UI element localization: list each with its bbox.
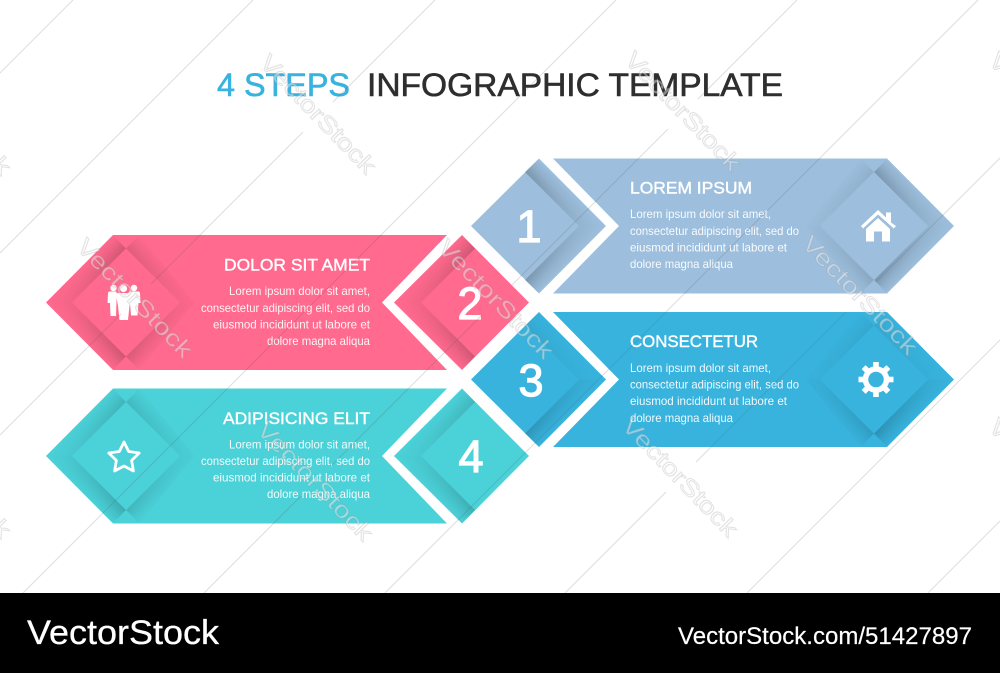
number diamond 3 bbox=[471, 312, 606, 447]
panel: step 1 lorem ipsum bbox=[471, 158, 955, 294]
body text 3: dolore magna aliqua bbox=[630, 411, 733, 425]
heading 1: LOREM IPSUM bbox=[630, 178, 752, 198]
number diamond 1: 1 bbox=[516, 201, 542, 252]
body text 2: consectetur adipiscing elit, sed do bbox=[201, 301, 370, 315]
panel: step 4 adipisicing elit bbox=[45, 388, 529, 524]
title accent: 4 steps: 4 STEPS bbox=[217, 67, 350, 103]
arrow banner 2 bbox=[46, 235, 447, 370]
footer brand: VectorStock bbox=[27, 614, 220, 652]
arrow banner 1 bbox=[553, 158, 954, 294]
body text 4: dolore magna aliqua bbox=[267, 487, 370, 501]
title main: infographic template: INFOGRAPHIC TEMPLATE bbox=[367, 67, 783, 103]
text: VectorStock bbox=[255, 49, 382, 179]
heading 3: CONSECTETUR bbox=[630, 332, 758, 351]
heading 4: ADIPISICING ELIT bbox=[223, 409, 370, 428]
body text 1: dolore magna aliqua bbox=[630, 257, 733, 271]
body text 1: Lorem ipsum dolor sit amet, bbox=[630, 207, 771, 221]
number diamond 2: 2 bbox=[457, 278, 483, 329]
arrow banner 4 bbox=[46, 388, 447, 524]
body text 2 bbox=[201, 284, 371, 348]
body text 2: eiusmod incididunt ut labore et bbox=[213, 318, 371, 332]
heading 2: DOLOR SIT AMET bbox=[224, 256, 370, 274]
title bbox=[217, 67, 783, 103]
text: VectorStock bbox=[72, 233, 199, 363]
footer bar bbox=[0, 593, 1000, 673]
footer image id: VectorStock.com/51427897 bbox=[678, 623, 972, 650]
text: VectorStock bbox=[433, 234, 560, 364]
icon diamond: gear bbox=[822, 320, 934, 444]
body text 2: Lorem ipsum dolor sit amet, bbox=[229, 284, 370, 298]
body text 2: dolore magna aliqua bbox=[267, 334, 370, 348]
number diamond 4: 4 bbox=[458, 431, 484, 482]
body text 4: consectetur adipiscing elit, sed do bbox=[201, 454, 370, 468]
icon diamond: star bbox=[66, 393, 178, 520]
body text 3: Lorem ipsum dolor sit amet, bbox=[630, 361, 771, 375]
number diamond 1 bbox=[471, 158, 606, 294]
text: VectorStock bbox=[252, 416, 379, 546]
body text 1: consectetur adipiscing elit, sed do bbox=[630, 224, 799, 238]
number diamond 4 bbox=[394, 388, 529, 524]
text: VectorStock bbox=[620, 46, 747, 176]
text: VectorStock bbox=[617, 412, 744, 542]
body text 4: eiusmod incididunt ut labore et bbox=[213, 470, 371, 484]
body text 4 bbox=[201, 438, 371, 501]
body text 1 bbox=[630, 207, 799, 271]
number diamond 2 bbox=[394, 235, 529, 370]
body text 3: eiusmod incididunt ut labore et bbox=[630, 394, 788, 408]
arrow banner 3 bbox=[553, 312, 954, 447]
body text 1: eiusmod incididunt ut labore et bbox=[630, 240, 788, 254]
number diamond 3: 3 bbox=[518, 355, 544, 406]
body text 3 bbox=[630, 361, 799, 425]
icon diamond: people bbox=[64, 238, 184, 367]
panel: step 2 dolor sit amet bbox=[45, 235, 529, 370]
body text 3: consectetur adipiscing elit, sed do bbox=[630, 378, 799, 392]
body text 4: Lorem ipsum dolor sit amet, bbox=[229, 438, 370, 452]
text: VectorStock bbox=[797, 230, 924, 360]
panel: step 3 consectetur bbox=[471, 312, 955, 447]
icon diamond: house bbox=[822, 162, 936, 290]
